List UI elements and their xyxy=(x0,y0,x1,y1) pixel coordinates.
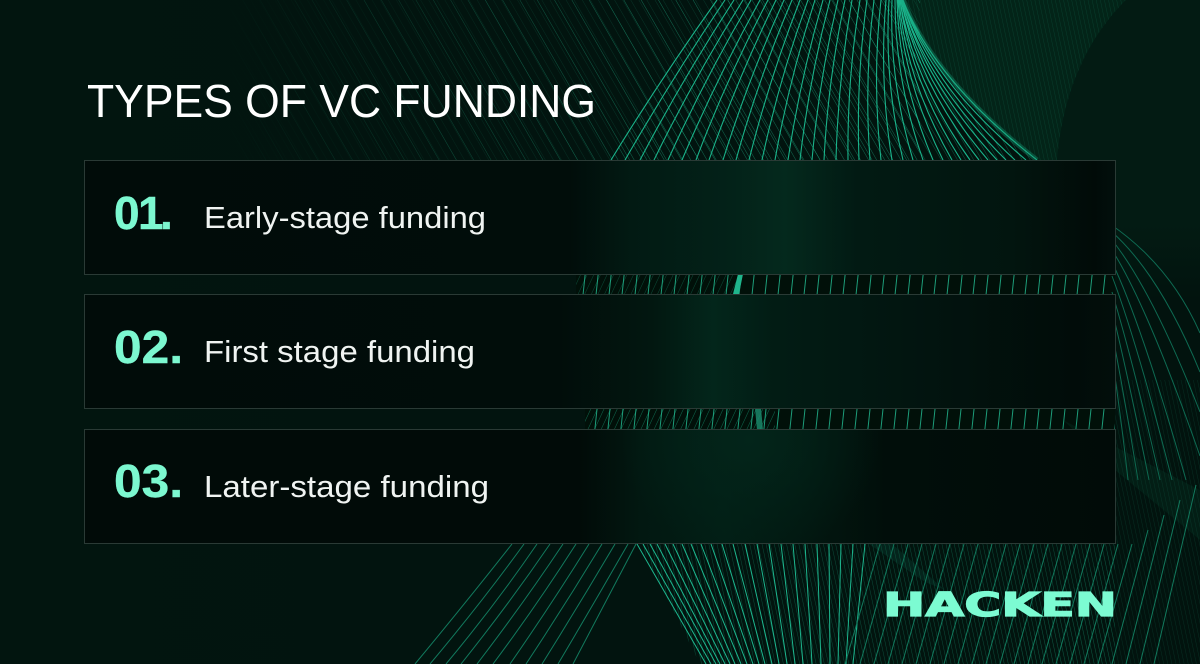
logo: Hacken wordmark: HACKEN xyxy=(883,585,1117,624)
label: later-stage funding: Later-stage funding xyxy=(204,469,489,504)
strips between cards xyxy=(576,274,1115,295)
label: first stage funding: First stage funding xyxy=(204,334,475,369)
panel: later-stage funding xyxy=(84,429,1116,544)
panel: early-stage funding xyxy=(84,160,1116,275)
label: early-stage funding: Early-stage funding xyxy=(204,200,486,235)
right side arcs xyxy=(1000,380,1200,664)
title: TYPES OF VC FUNDING xyxy=(87,75,596,127)
background line waves xyxy=(258,0,1200,664)
panel: first stage funding xyxy=(84,294,1116,409)
upper right dark green lobe xyxy=(1057,0,1200,300)
number 02: 02. xyxy=(114,321,183,373)
number 01: 01. xyxy=(114,187,173,239)
fine diagonal hatching top xyxy=(338,0,920,160)
bright fan lines xyxy=(611,0,1037,160)
lower fan lines xyxy=(640,544,1115,664)
number 03: 03. xyxy=(114,455,183,507)
